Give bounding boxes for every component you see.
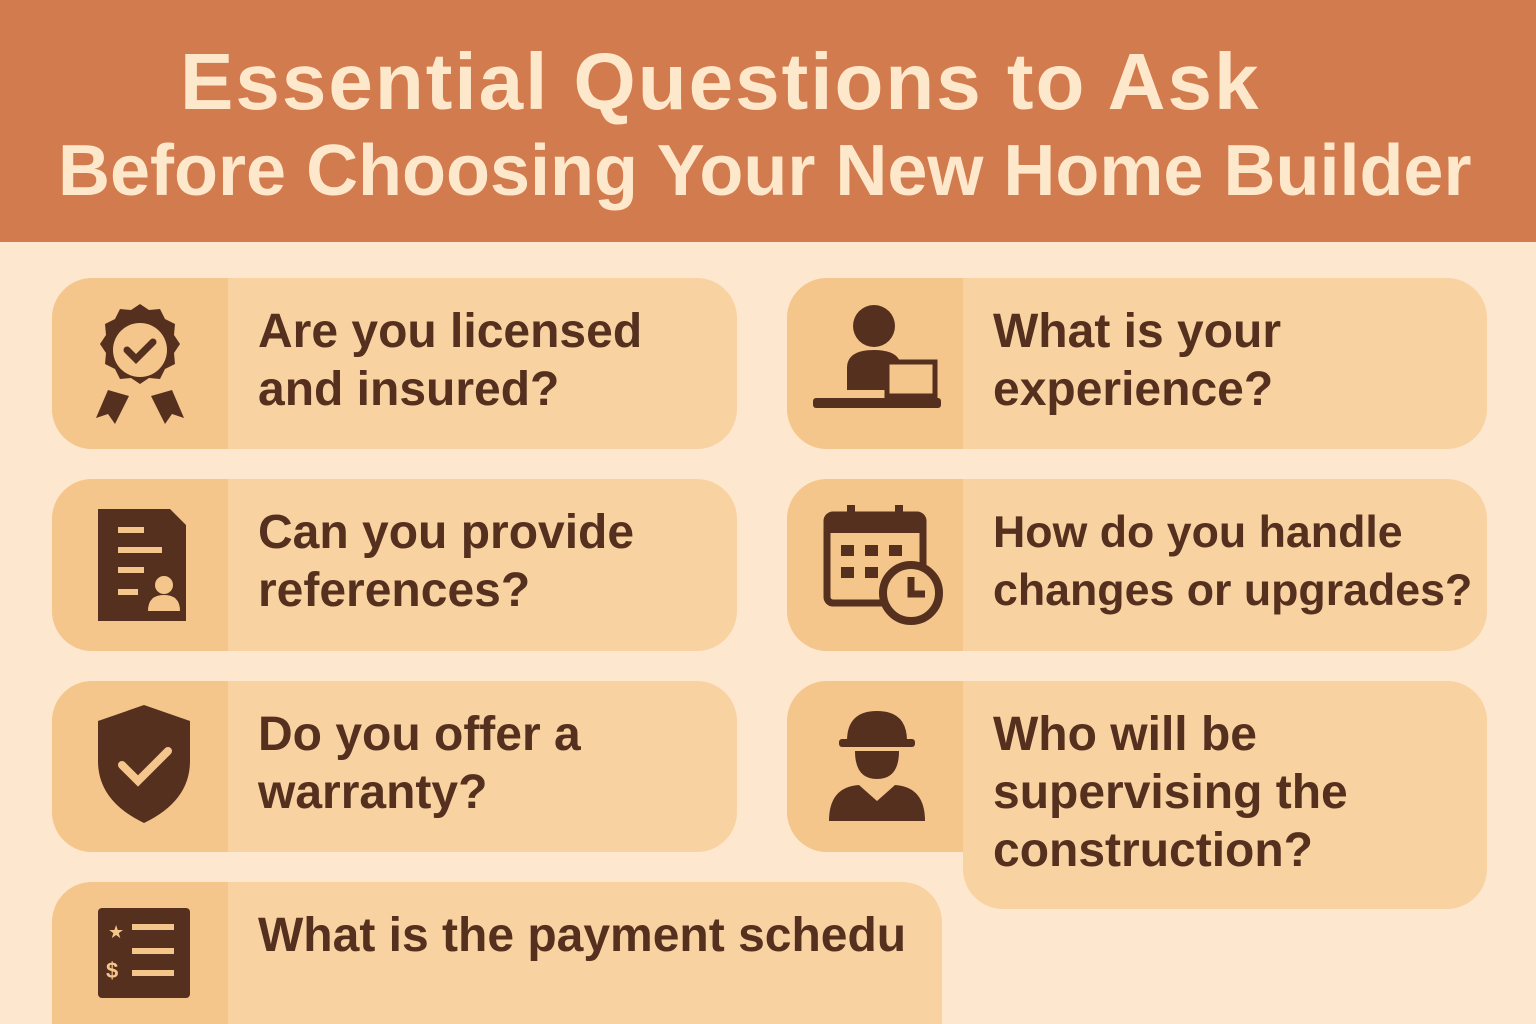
card: supervising: Who will be [993, 708, 1257, 761]
card: changes: How do you handle [993, 508, 1403, 557]
card: changes: changes or upgrades? [993, 566, 1472, 615]
card: payment schedule [52, 882, 942, 1024]
icon: document with person [52, 479, 228, 651]
icon: calendar with clock [787, 479, 963, 651]
icon: list with dollar [52, 882, 228, 1024]
icon: list with dollar: $ [106, 958, 118, 983]
card: references: Can you provide [258, 506, 634, 559]
card: references [52, 479, 737, 651]
title line 1: Essential Questions to Ask [180, 37, 1260, 126]
card: warranty: warranty? [258, 766, 487, 819]
card: experience: What is your [993, 305, 1281, 358]
card: licensed: Are you licensed [258, 305, 642, 358]
icon: award badge [52, 278, 228, 449]
card: experience [787, 278, 1487, 449]
card: warranty [52, 681, 737, 852]
card: experience: experience? [993, 363, 1273, 416]
card: supervising [787, 681, 1487, 909]
card: licensed [52, 278, 737, 449]
card: supervising: construction? [993, 824, 1313, 877]
icon: person at laptop [787, 278, 963, 449]
icon: list with dollar: ★ [108, 922, 124, 942]
icon: shield check [52, 681, 228, 852]
card: licensed: and insured? [258, 363, 559, 416]
card: changes [787, 479, 1487, 651]
icon: worker with hard hat [787, 681, 963, 852]
card: supervising: supervising the [993, 766, 1348, 819]
title line 2: Before Choosing Your New Home Builder [58, 131, 1472, 211]
card: references: references? [258, 564, 530, 617]
card: warranty: Do you offer a [258, 708, 581, 761]
header banner [0, 0, 1536, 242]
